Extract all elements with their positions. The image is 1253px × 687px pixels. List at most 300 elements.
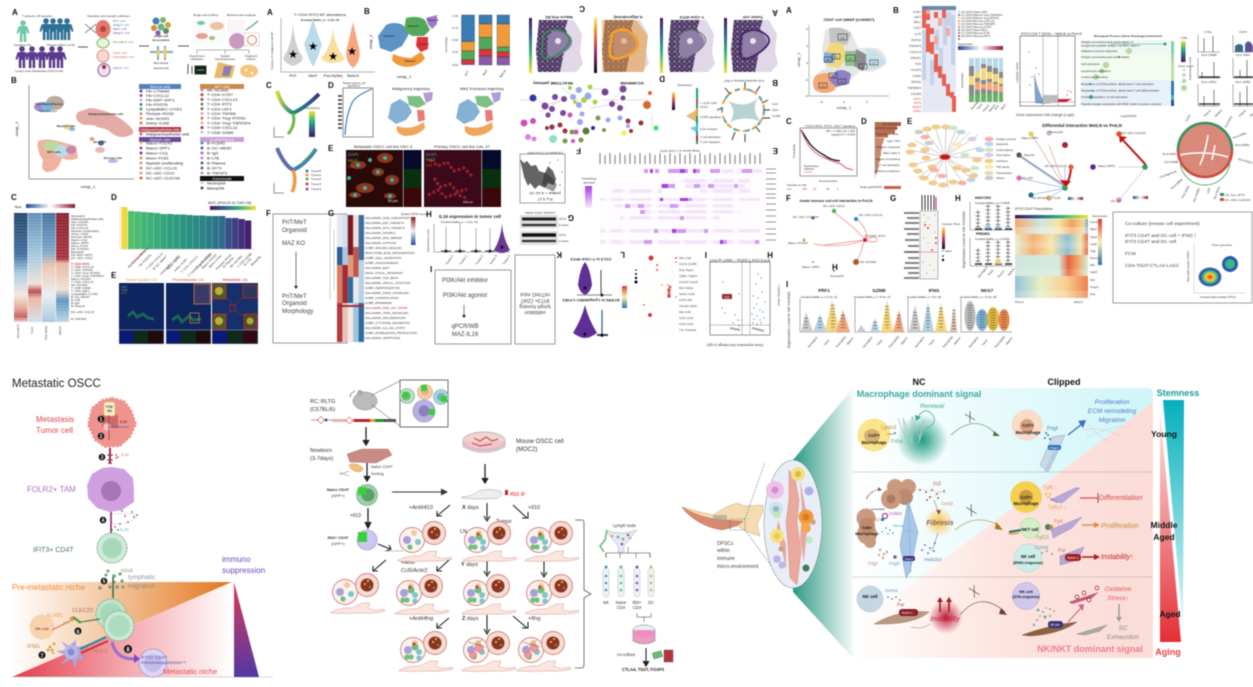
label: RC::RLTG strain: RC::RLTG [310,399,335,405]
chart: tumor UMAP [368,15,439,79]
panel: PI3K experiment box: PI3K/Akt inhibitor [442,278,488,284]
treatment labels: Tumor [496,519,512,525]
chart: CD4T cell UMAP: C1 [834,55,838,59]
panel label E: immunofluorescence: E [111,271,117,280]
images: MAZ immunofluorescence: DAPI [426,152,437,157]
clipped macrophage middle: Macrophage [1014,501,1039,506]
IFNG and dendritic cell [27,640,84,668]
chart: exhaustion marker violins: HAVCR2 [975,195,992,200]
chart: marker gene heatmap: TNFRSF4 [908,86,921,90]
macrophage NC top: Lgals9 [881,425,896,431]
legend: cell types right column: T−CD4−Treg−RTKN2 [207,116,246,121]
chart: pathway heatmap: HALLMARK_G2M_CHECKPOINT [365,216,411,220]
chart: AUC bar chart: Fib−POSTN [138,253,152,268]
treatment labels: X days [462,505,479,511]
chart: atlas UMAP: Malignant/epithelial cells [88,112,124,116]
treatment arrows [373,503,547,634]
legend: cell types right column: B−SYT1 [207,166,223,170]
panel label E: IFIT3 interaction heatmap: E [772,146,778,155]
chart: abundance violins: ★ [347,46,357,58]
chart: CD4T cell UMAP: C2 [841,36,845,40]
chart: cluster composition stacked bars: MetT [1000,103,1007,111]
chart: IFIT3 CD4 T volcano: −Log10(p.value) [1015,62,1019,84]
chart: IL16 violin: Kruskal-Wallis, p < 2.2e−16 [441,220,478,224]
panel: lineage tracing validation box [515,255,555,344]
chart: AUC bar chart: NK−NCAM1 [229,254,244,269]
label: Newborn [310,448,333,462]
chart: pathway heatmap: HALLMARK_DNA_REPAIR [365,236,403,240]
workflow: dissociation and microfluidics: sequencing [153,66,169,70]
chart: differential network right: Macro-SPP1 [1098,164,1115,168]
chart: marker gene heatmap: SELL [914,20,921,24]
panel label G: chemokine dot heatmap: G [890,194,896,203]
chart: tumor cluster stacked bars: 1.00 [452,14,458,18]
chart: differential network left: Myeloid [1024,153,1035,157]
legend: cell types left column: DC−cDC−CLEC9A [146,176,180,180]
naive CD4T cell: Naive CD4T [327,487,350,492]
images: western blots: scramble shCtrl shMaz [524,211,555,215]
chart: Ro/e heatmap: Mono−FCN1 [71,244,88,248]
blue fibroblast NC middle: Nfatc1 [905,557,914,561]
label: FOLR2+ TAM: FOLR2+ TAM [27,485,76,494]
panel label D: ranked pathways: D [861,117,867,126]
chart: CD4T cell UMAP: C4 [840,80,844,84]
chart: pseudotime trajectories: Tumor1 [311,173,322,177]
chart: exhaustion marker violins: Expression Level in NK-NCAM1 [961,211,966,268]
chart: pathway heatmap: HALLMARK_INFLAMMATORY [365,316,406,320]
panel L: dot plot: CCL5−CCR5 [679,262,697,266]
chart: abundance violins: T−CD4−IFIT3 MT abundance [294,12,347,17]
chart: cytotoxic gene violins: GZMB [872,288,886,293]
images: MAZ immunofluorescence: Metastatic OSCC cell line HSC-3 [354,144,413,149]
chart: abundance violins: ★ [308,41,318,53]
treatment labels: Y days [461,562,478,568]
chart: AUC bar chart: Myeloid−proliferating [127,246,150,269]
chart: marker gene heatmap: TNFAIP3 [909,44,921,48]
clipped macrophage middle: Tgfbr3 ↓ [1048,505,1066,511]
legend: cell types left column: Myeloid−proliferating [146,160,183,166]
legend: cell types right column: T−CD8−CXCL13 [207,125,238,130]
IL10 release [100,510,138,535]
chart: innate immune network: Neutrophil [830,274,844,278]
chart: Kaplan-Meier survival [787,124,857,191]
chart: circos IL16 signaling: IL16 signaling pathway in MeT [724,79,764,83]
chart: IFIT3 CD4T pseudotime heatmap: Foxp3 [1090,285,1099,289]
legend: cell types left column: Pericyte−RGS5 [146,111,174,116]
IL10 release: 4 [102,518,105,524]
middle NC macrophages cluster: presentation [871,508,885,511]
NK IFNG response instability: NK cell [1021,554,1035,559]
chart: antigen presentation gene violins: CD74 [1239,30,1247,34]
Pdgf Pdgfr NC middle: Pdgfr [889,561,900,566]
panel H/I: inverted volcano [705,250,781,347]
chart: enrichment bar chart: IFN signaling [882,122,900,126]
panel K: violins: ★ [582,331,588,338]
age labels [1151,429,1181,619]
chart: differential network right [1090,131,1148,203]
chart: marker gene heatmap: CXCR6 [911,92,921,96]
chart: biological process lollipop: exogenous peptide antigen via MHC class II [1081,44,1140,48]
chart: pathway heatmap: HALLMARK_KRAS_SIGNALING [365,291,410,295]
chart: IL16 violin: Tumor 4 [502,254,511,266]
chart: marker gene heatmap: C0.CD4T.Naive.LEF1 [961,10,988,14]
naive CD4T cell [327,484,378,506]
chart: Kaplan-Meier survival: Probability [792,143,796,158]
chart heading: differential interaction: Differential interaction MetLN vs PreLN [1042,123,1122,128]
chart: malignancy trajectory UMAP [388,86,433,136]
chart: ligand receptor dot heatmap [904,195,960,279]
lymph node sorting: Lymph node [613,523,637,528]
clipped outcome text top: Migration [1099,417,1126,424]
Il1b Cxcl2 signal and fibrosis [917,481,954,537]
chart: tumor cluster stacked bars [444,14,510,79]
workflow: sample collection organs: NormalLN: n=1 [113,40,134,44]
lymph node sorting [600,523,650,558]
treatment labels: Ccl5/Ackr2 [401,568,428,574]
chart: pseudotime trajectories [274,91,322,193]
mouse: row 1 treatments [398,522,579,562]
legend: cell types right column: T−CD4−Treg−TNFRSF4 [207,120,251,125]
chart: AUC bar chart: Pericyte−RGS5 [215,253,233,271]
chart: pathway heatmap: REACTOME_ECM_ORGANIZATION [365,251,415,255]
chart: tumor UMAP: Tumor3 [384,34,395,38]
chart: IFIT3 CD4T pseudotime heatmap: Ifit3 [1090,263,1095,267]
images: western blots [520,211,569,245]
chart: differential network right: DC-LN [1111,199,1120,203]
chart: AUC bar chart: Macro−FOLR2 [201,253,218,270]
aging triangle: Aging [1155,647,1181,657]
chart: MAZ knockout trajectory UMAP: MAZ Knockout trajectory [460,86,504,91]
chart: pathway heatmap: HALLMARK_MTORC1 [365,231,396,235]
treatment labels: +Il10 [528,505,540,511]
panel K: violins: K [556,250,562,259]
chart: ligand receptor circos [1159,114,1253,202]
workflow: analyses and validation thumbnails [188,13,259,78]
chart: abundance violins: PriT [289,73,297,78]
chart: marker gene heatmap: Expression [958,42,973,46]
chart: ligand receptor circos: HLA-DMB [1164,160,1178,164]
label: Metastasis Tumor cell: Tumor cell [36,426,73,435]
NK IFNG response instability [1013,544,1134,572]
CLEC2D KLRB1 interaction: CLEC2D [72,608,93,614]
chart: CD4T cell UMAP: 6 [806,27,808,31]
chart: IFIT3 CD4T pseudotime heatmap: Tigit [1090,249,1096,253]
chart: tumor UMAP: umap_2 [368,34,373,49]
legend: cell types right column: Neutrophil [207,180,225,186]
legend: cell types right column: T−CD4−CCR7 [207,92,234,97]
panel K: violins [556,250,620,339]
treatment labels: +AntiHfng [409,616,433,622]
chart: IL16 violin: ★ [473,248,479,255]
chart: Ro/e heatmap: T−CD4−IFIT3 [71,262,90,266]
panel L: dot plot: Ifng−Ifngr1 [679,268,694,272]
images: lymph node immunofluorescence: Metastatic LN [223,277,247,282]
chart: correlation scatter: R = 0.17 [537,197,553,202]
chart: pathway heatmap: HALLMARK_IL6_JAK_STAT3 [365,326,405,330]
clipped macrophage middle: Ccl7+ [1020,495,1032,500]
clipped macrophage top: Pdgf [1047,426,1058,432]
panel label E: cell line images: E [328,144,334,153]
chart: tumor UMAP: Tumor1 [419,42,430,46]
panel label H: neutrophil marker: H [832,263,838,272]
chart: ligand receptor rank bar: Expression [678,83,693,87]
panel L: dot plot: Hla−Cd4 [679,310,691,314]
panel label A: spatial: A [772,8,778,17]
chart: Ro/e heatmap: B−LTB [71,298,80,302]
images: western blots: β-Actin [559,223,569,227]
chart: CD4T cell UMAP [796,17,889,110]
chart: AUC bar chart: AUC (PreLN vs TuN LN) [208,200,252,205]
chart: enrichment bar chart: type I IFN [887,139,900,143]
legend: cell types right column: T−CD4−IFIT3 [207,102,232,107]
chart: ligand receptor purple heatmap: potential [583,181,595,185]
chart: marker gene heatmap: CXCL13 [910,50,921,54]
clipped macrophage top: Macrophage [1016,430,1041,435]
chart: circos IL16 signaling [700,79,780,142]
images: spatial tissue maps: IL16(predicted) [613,15,642,20]
panel L: dot plot: Tgfb1−Tgfbr2 [679,274,697,278]
chart: AUC bar chart: Basophils [250,254,262,267]
chart: tumor cluster stacked bars: 0.25 [452,50,458,54]
workflow: analyses and validation thumbnails: Spatial [220,54,230,58]
treatment labels: +Ifng [528,616,540,622]
Pdgf Pdgfr NC middle: Pdgf [868,561,878,566]
chart: ligand receptor dot heatmap: Interact. Prob [942,222,960,226]
chart: innate immune network: Macro−SPP1 [802,265,820,269]
panel L: dot plot [620,250,698,335]
chart: cytotoxic gene violins: NormalLN [968,336,979,349]
chart: ligand receptor circos: HLA-DQA1 [1238,157,1253,165]
scissors arrow middle [955,504,1003,530]
age labels: Young [1151,429,1177,439]
chart: antigen presentation gene violins: CTSL [1204,30,1212,34]
SC exhaustion outcome: Exhaustion [1107,634,1139,641]
chart: marker gene heatmap: TOX [915,62,921,66]
sorted cell tubes: NK [603,600,609,605]
IFNG and dendritic cell: IFNG [27,644,40,650]
NKT cell proliferation: Fgf13 [1036,535,1049,541]
chart: Ro/e heatmap: T−CD4−CXCL13 [71,280,94,284]
panel label E: gene network: E [907,117,913,126]
chart: cytotoxic gene violins: PreLN(Nb) [994,335,1006,349]
chart: atlas UMAP: Granulocytes [39,109,57,113]
chart: CD4T cell UMAP: CD4T cell UMAP (n=60827) [824,17,875,22]
Cd8 macrophage middle: Sema3 [893,523,906,528]
chart: pathway heatmap: GOBP_EPIDERMIS [365,301,392,305]
images: lymph node immunofluorescence: Tumor burden LN [125,277,157,282]
workflow: analyses and validation thumbnails: validation [191,57,204,61]
chart: malignancy trajectory UMAP: Malignancy trajectory [392,86,430,91]
MHC II receptor: MHCII [93,649,108,655]
IL16 release: 3 [101,455,104,461]
chart: Ro/e heatmap: Malignant/epithelial cells [71,217,104,221]
tumor-bearing mouse and staining: Ifit3 IF [510,492,526,498]
chart: AUC bar chart: B−GC−MKI67 [152,254,168,271]
chart: biological process lollipop: Biological Process (Gene Ontology) enrichment [1094,34,1162,38]
chart: tumor cluster stacked bars: 0.50 [452,38,458,42]
chart: IFIT3 CD4 T volcano: Gene expression fold change (Log2) [1016,113,1074,117]
instability red [911,597,963,634]
chart: marker gene heatmap: ISG15 [912,105,921,109]
chart: atlas UMAP: Fibroblasts/Plasma [35,102,63,106]
Ifit3+ CD4T cell: (GFP+) [331,541,345,546]
chart: Kaplan-Meier survival: 5 [837,187,839,191]
chart: Ro/e heatmap: LympatidEC−LYVE1 [71,292,98,296]
workflow: sample collection organs: (PatjyT: n=4 [113,23,129,27]
chart: Ro/e heatmap: Fib−EMT−KRT1 [71,253,93,257]
chart: biological process lollipop: Antigen processing and presentation [1081,55,1130,59]
chart: AUC bar chart: LympatidEC−LYVE1 [159,253,181,276]
panel H/I: inverted volcano: IFIT3 CD4 T DEGs − MetT vs PriT [709,258,770,263]
Pdgf Pdgfr NC middle: Hsd11b2 [924,557,942,562]
immunosuppressive T cell: immunosuppressive++ [141,660,187,665]
culture dish [463,432,505,452]
legend: cell types left column: Fib−POSTN [146,102,168,107]
chart: atlas UMAP: umap_1 [81,184,96,189]
chart: enrichment bar chart [860,122,901,189]
age labels: Aged [1159,609,1181,619]
treatment labels: +Anti- [401,560,416,566]
chart: Kaplan-Meier survival: 93 [813,187,817,191]
CLEC2D KLRB1 interaction: KLRB1 [47,613,64,619]
niche triangles [12,582,273,677]
panel: mouse experimental design [310,380,673,672]
chart: CD4T cell UMAP: −6 [805,94,808,98]
chart: enrichment bar chart: NegLog10(FDR) [860,185,882,189]
chart: Ro/e heatmap: T−CD4−Treg−RTKN2 [71,271,100,275]
chart: Ro/e heatmap: Ro/e [15,205,22,209]
IL16 release [99,448,130,464]
chart: pathway heatmap: GOBP_ANGIOGENESIS [365,261,398,265]
chart: tumor cluster stacked bars: priT [464,70,470,77]
images: spatial tissue maps: Macro−FOLR2 [545,15,573,20]
legend: cell types right column: Basophils [207,186,224,190]
suppression arrow and marker 8: 8 [126,648,130,654]
panel: dental pulp stem cell niche model [682,377,1199,658]
chart: marker gene heatmap: FOXP3 [911,68,921,72]
panel L: dot plot: Ccl4−Ccr5 [679,322,693,326]
chart: biological process lollipop: Cell activation [1081,62,1100,66]
chart: innate immune network: DC−cDC−CCL19 [859,213,882,217]
chart: IFIT3 CD4 T volcano: IFIT3 CD4 T DEGs − MetLN vs PreLN [1021,32,1082,36]
images: MAZ immunofluorescence: MAZ [426,157,436,162]
NKT cell proliferation: NKT cell [1022,527,1038,532]
legend: cell types right column: T−CD4−TNFAI6 [207,111,236,116]
tumor cell: 1 [100,417,103,423]
chart: AUC bar chart: B−LTB [243,257,252,267]
chart: exhaustion marker violins: MetLN [1007,267,1015,277]
chart: CD4T cell UMAP: 3 [806,44,808,48]
legend: cell types right column: B−Plasma [207,160,226,166]
IL16 release: IL16 [121,452,130,457]
chart: pathway heatmap: HALLMARK_APICAL_JUNCTION [365,281,410,285]
chart: pseudotime trajectories: Tumor4 [311,187,322,191]
NK IFNG response instability: Gzma [1035,545,1049,551]
chart: antigen presentation gene violins: HLA−DRA [1236,53,1250,57]
chart: AUC bar chart: Mono−FCN1 [208,254,223,269]
panel L: dot plot: L [620,250,625,259]
chart: exhaustion marker violins: Kruskal-Wallis, p = 0.0021 [975,237,1010,241]
chart: cytotoxic gene violins: NormalLN [862,336,873,349]
clipped outcome text top: Proliferation [1095,399,1130,406]
chart: cytotoxic gene violins: TuLN [981,339,988,347]
legend: cell types right column: B−TNFSF9 [207,170,228,176]
workflow: dissociation and microfluidics: single cell [154,34,168,38]
chart: CD4T cell UMAP: 0 [806,61,808,65]
images: spatial tissue maps [529,15,778,73]
panel label B: atlas UMAP: B [11,76,17,85]
chart: exhaustion marker violins: PRDM1 [976,231,991,236]
chart: IL16 violin: IL16 expression in tumor cell [439,214,501,219]
chart: IFIT3 CD4T pseudotime heatmap: Il10 [1090,278,1095,282]
mouse and cell inset [350,380,448,427]
chart: exhaustion marker violins: PreLN [997,270,1005,279]
chart: Ro/e heatmap: Artery−GJA5 [71,232,89,236]
panel: organoid experiment box: MAZ KO [282,241,305,247]
chart: marker gene heatmap: C8.CD4T.Memory.IFIT3 [961,34,991,38]
panel: organoid experiment box: PriT/MeT [282,220,307,226]
magnified ellipse of microenvironment [764,460,822,588]
chart: Ro/e heatmap: PreLN(Nb) [44,326,48,340]
label: immuno suppression: immuno [222,555,251,564]
chart: cytotoxic gene violins: Kruskal-Wallis, p = 8.4e−13 [854,295,891,299]
macrophage NC top [858,419,903,451]
chart: marker gene heatmap: IL2RA [913,74,921,78]
SC exhaustion outcome: SC [1118,625,1128,632]
chart: enrichment bar chart: MHC class II [883,151,900,155]
NK cell NC bottom: Gzma [885,588,898,594]
panel label C: pseudotime: C [266,81,272,90]
chart: biological process lollipop: Antigen processing and presentation of [1081,40,1133,44]
panel: organoid experiment box: Organoid [282,301,307,307]
chart: circos IL16 signaling: IL16 [772,102,778,106]
clipped NK cell and NF-kb: NF-kb↑ [1050,623,1061,627]
Pdgf Pdgfr NC middle [868,533,942,566]
chart: AUC bar chart [120,200,262,278]
chart: tumor UMAP: Tumor0 [405,59,416,63]
chart: biological process lollipop: Adaptive immune response [1081,49,1118,53]
panel label D: trajectory: D [328,81,334,90]
chart: ranking line plot: MeT/PriT [348,84,360,88]
chart: antigen presentation gene violins: HLA−DPB1 [1235,80,1251,84]
chart: tumor cluster stacked bars: MetLN [499,69,507,79]
panel: co-culture experiment box: FCW [1125,251,1136,257]
chart: IFIT3 CD4T pseudotime heatmap [1015,207,1108,304]
panel label F: organoid: F [266,209,271,218]
chart: cytotoxic gene violins: MetLN [846,336,854,346]
chart: atlas UMAP: umap_2 [14,121,19,136]
images: lymph node immunofluorescence: IFIT3 [121,292,127,295]
panel: IFIT3 CD4 T cell analysis [786,6,1253,349]
immunosuppressive T cell [139,649,187,677]
panel L: dot plot: Clec2d−Klrb1 [679,304,697,308]
arrow and label: +Il10 [350,508,371,528]
chart: marker gene heatmap: C7.CD4T.Memory.IL7R [961,31,990,35]
chart: ligand receptor circos: HLA-DPB1 [1235,143,1250,147]
panel L: dot plot: Cxcl13−Cxcr5 [679,280,698,284]
chart: biological process lollipop: Leukocyte activation [1081,75,1109,79]
workflow: patient cohort icons [14,14,75,73]
workflow: sample collection organs: TuLN: n=3 [113,51,127,55]
sorted cell tubes: Naive [616,600,627,605]
CLEC2D KLRB1 interaction [47,608,100,636]
panel: Metastatic OSCC model [12,378,273,677]
chart: biological process lollipop: Peptide antigen assembly with MHC class II protein complex [1081,102,1162,106]
clipped NK cell and NF-kb: (GTA-response) [1013,595,1040,599]
panel: PI3K experiment box [435,270,511,344]
chart: CD4T cell UMAP: 0 [843,100,845,104]
panel label I: PI3K validation: I [430,265,432,274]
